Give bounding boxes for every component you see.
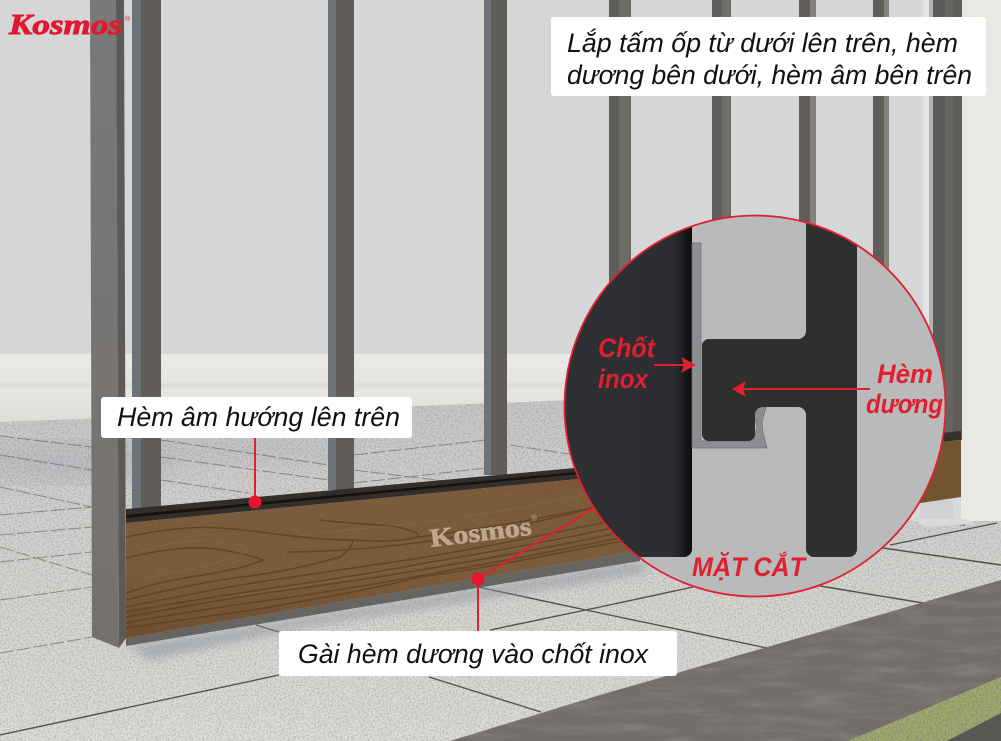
right rail end [900,431,961,446]
label: male tongue: dương [866,389,943,419]
wall [0,0,1001,356]
label: stainless pin [598,333,656,394]
label: cross section: MẶT CẮT [692,551,807,582]
arrow to stainless pin [654,357,696,373]
label: stainless pin: Chốt [598,333,656,363]
brand logo: ® [125,15,131,23]
upright 2 [328,0,354,490]
brand logo: Kosmos [8,10,122,41]
baseboard [0,354,1001,426]
upright 6 [799,0,816,440]
rail groove line [126,466,640,518]
male tongue profile [702,210,857,557]
section detail circle [560,210,946,597]
arrow to male tongue [732,381,870,397]
label: male tongue [866,359,943,419]
light strip beside end post [923,0,933,354]
adjustable foot [915,500,975,527]
gate shadow on floor [126,561,650,660]
label: stainless pin: inox [598,364,649,394]
wood panel [126,470,640,640]
upright 3 [484,0,507,475]
stainless clip [692,243,767,448]
callout: male tongue [279,631,677,676]
right end post [933,0,962,440]
upright 5 [712,0,731,440]
callout leader: male tongue to section [472,504,600,632]
callout: install instruction: dương bên dưới, hèm âm bên trên [567,60,972,90]
left panel in section [560,210,692,557]
callout: install instruction: Lắp tấm ốp từ dưới lên trên, hèm [567,27,958,58]
label: male tongue: Hèm [877,359,933,389]
callout: female groove [101,397,412,438]
callout: female groove: Hèm âm hướng lên trên [117,402,400,432]
upright 4 [609,0,631,460]
rail: female groove [126,462,640,523]
callout: male tongue: Gài hèm dương vào chốt inox [298,639,649,669]
panel logo: ® [531,513,538,523]
grass strip [848,677,1001,741]
gate uprights [132,0,889,510]
callout leader: female groove [248,436,262,508]
right cream wall [961,0,1001,522]
paved floor [0,395,1001,741]
right end of wood panel [900,440,961,506]
road kerb [450,580,1001,741]
left front post [90,0,126,648]
callout: install instruction [551,17,986,96]
upright 7 [873,0,889,440]
upright 1 [132,0,161,510]
panel logo: Kosmos [428,512,533,553]
dark road corner [947,713,1001,741]
panel bottom frame [126,551,640,646]
